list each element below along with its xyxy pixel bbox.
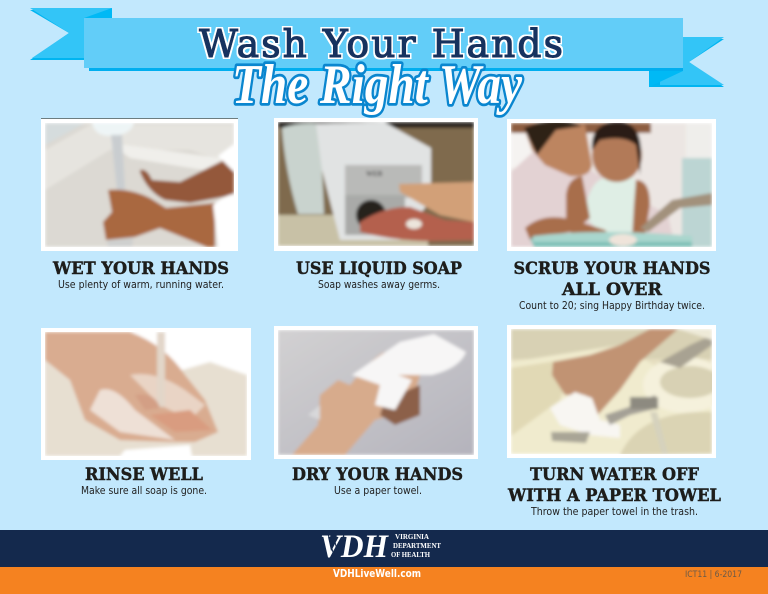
- panel: wet your hands photo: [41, 118, 238, 251]
- step 6 caption: WITH A PAPER TOWEL: [507, 486, 721, 506]
- step 3 caption: SCRUB YOUR HANDS: [514, 259, 710, 279]
- website link: VDHLiveWell.com: [333, 568, 421, 580]
- footer: orange band: [0, 567, 768, 594]
- panel: use liquid soap photo: WEB: [366, 170, 383, 178]
- step 2 caption: [296, 259, 462, 291]
- step 6 caption: TURN WATER OFF: [530, 465, 699, 485]
- title ribbon: [30, 8, 724, 87]
- step 3 caption: ALL OVER: [561, 280, 663, 300]
- logo: VDH Virginia Department of Health: OF HEALTH: [391, 550, 430, 559]
- logo: VDH Virginia Department of Health: [320, 529, 441, 565]
- step 5 caption: Use a paper towel.: [334, 485, 422, 497]
- panel: scrub your hands photo: [507, 119, 716, 251]
- panel: turn water off photo: [507, 325, 727, 458]
- step 4 caption: [81, 465, 207, 497]
- step 2 caption: Soap washes away germs.: [318, 279, 440, 291]
- panel: use liquid soap photo: [274, 118, 478, 251]
- step 1 caption: [52, 259, 229, 291]
- logo: VDH Virginia Department of Health: DEPARTMENT: [393, 541, 441, 550]
- step 4 caption: RINSE WELL: [85, 465, 203, 485]
- step 6 caption: [507, 465, 721, 518]
- step 4 caption: Make sure all soap is gone.: [81, 485, 207, 497]
- title: Wash Your Hands: Wash Your Hands: [199, 22, 563, 66]
- step 5 caption: [292, 465, 463, 497]
- step 1 caption: WET YOUR HANDS: [52, 259, 229, 279]
- document code: ICT11 | 6-2017: [685, 570, 742, 580]
- logo: VDH Virginia Department of Health: VDH: [320, 529, 389, 565]
- step 5 caption: DRY YOUR HANDS: [292, 465, 463, 485]
- step 2 caption: USE LIQUID SOAP: [296, 259, 462, 279]
- logo: VDH Virginia Department of Health: VIRGINIA: [395, 532, 430, 541]
- step 3 caption: [514, 259, 710, 312]
- footer: navy band: [0, 530, 768, 567]
- step 3 caption: Count to 20; sing Happy Birthday twice.: [519, 300, 705, 312]
- panel: rinse well photo: [41, 328, 251, 460]
- panel: dry your hands photo: [274, 326, 478, 459]
- step 1 caption: Use plenty of warm, running water.: [58, 279, 224, 291]
- subtitle: The Right Way: The Right Way: [232, 54, 523, 116]
- step 6 caption: Throw the paper towel in the trash.: [530, 506, 698, 518]
